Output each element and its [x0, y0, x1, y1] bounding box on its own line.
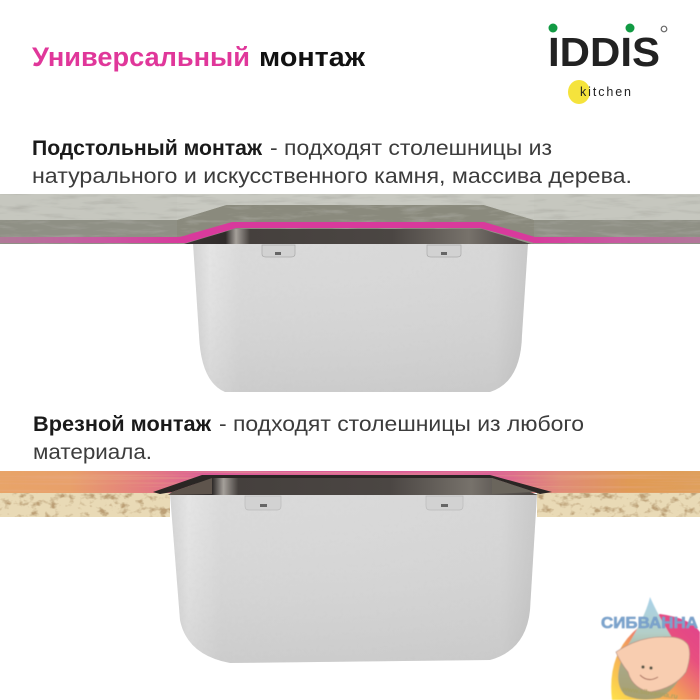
wood laminate top with pink sealant — [0, 471, 700, 493]
title — [32, 42, 366, 72]
bathtub character — [616, 637, 690, 692]
illustration: drop-in sink — [0, 471, 700, 663]
text: under-counter mounting: - подходят столешницы из — [270, 136, 552, 160]
text: drop-in mounting: материала. — [33, 440, 152, 464]
water drop — [618, 597, 682, 699]
logo: IDDIS kitchen: kitchen — [580, 85, 631, 99]
text: drop-in mounting: - подходят столешницы из любого — [219, 412, 584, 436]
logo: IDDIS kitchen — [548, 24, 667, 104]
osb countertop core — [0, 493, 700, 517]
gradient disc — [611, 614, 700, 700]
illustration: under-counter sink — [0, 194, 700, 392]
text: under-counter mounting: Подстольный монтаж — [32, 136, 263, 160]
mounting clip left — [245, 496, 281, 510]
logo: IDDIS kitchen: IDDIS — [548, 29, 660, 75]
dark steel rim — [184, 229, 531, 244]
title: Универсальный — [32, 42, 250, 72]
stone countertop — [0, 194, 700, 244]
sink bowl — [193, 243, 528, 392]
dark steel rim — [153, 475, 552, 495]
mounting clip left — [262, 245, 295, 257]
mounting clip right — [426, 496, 463, 510]
text: drop-in mounting: Врезной монтаж — [33, 412, 212, 436]
watermark: Sibvanna — [601, 597, 700, 700]
watermark: Sibvanna: СИБВАННА — [601, 615, 698, 632]
text: under-counter mounting: натурального и искусственного камня, массива дерева. — [32, 164, 632, 188]
title: монтаж — [259, 42, 366, 72]
pink adhesive line — [0, 222, 700, 243]
mounting clip right — [427, 245, 461, 257]
sink bowl — [170, 494, 537, 663]
text: under-counter mounting — [32, 136, 632, 188]
text: drop-in mounting — [33, 412, 584, 464]
